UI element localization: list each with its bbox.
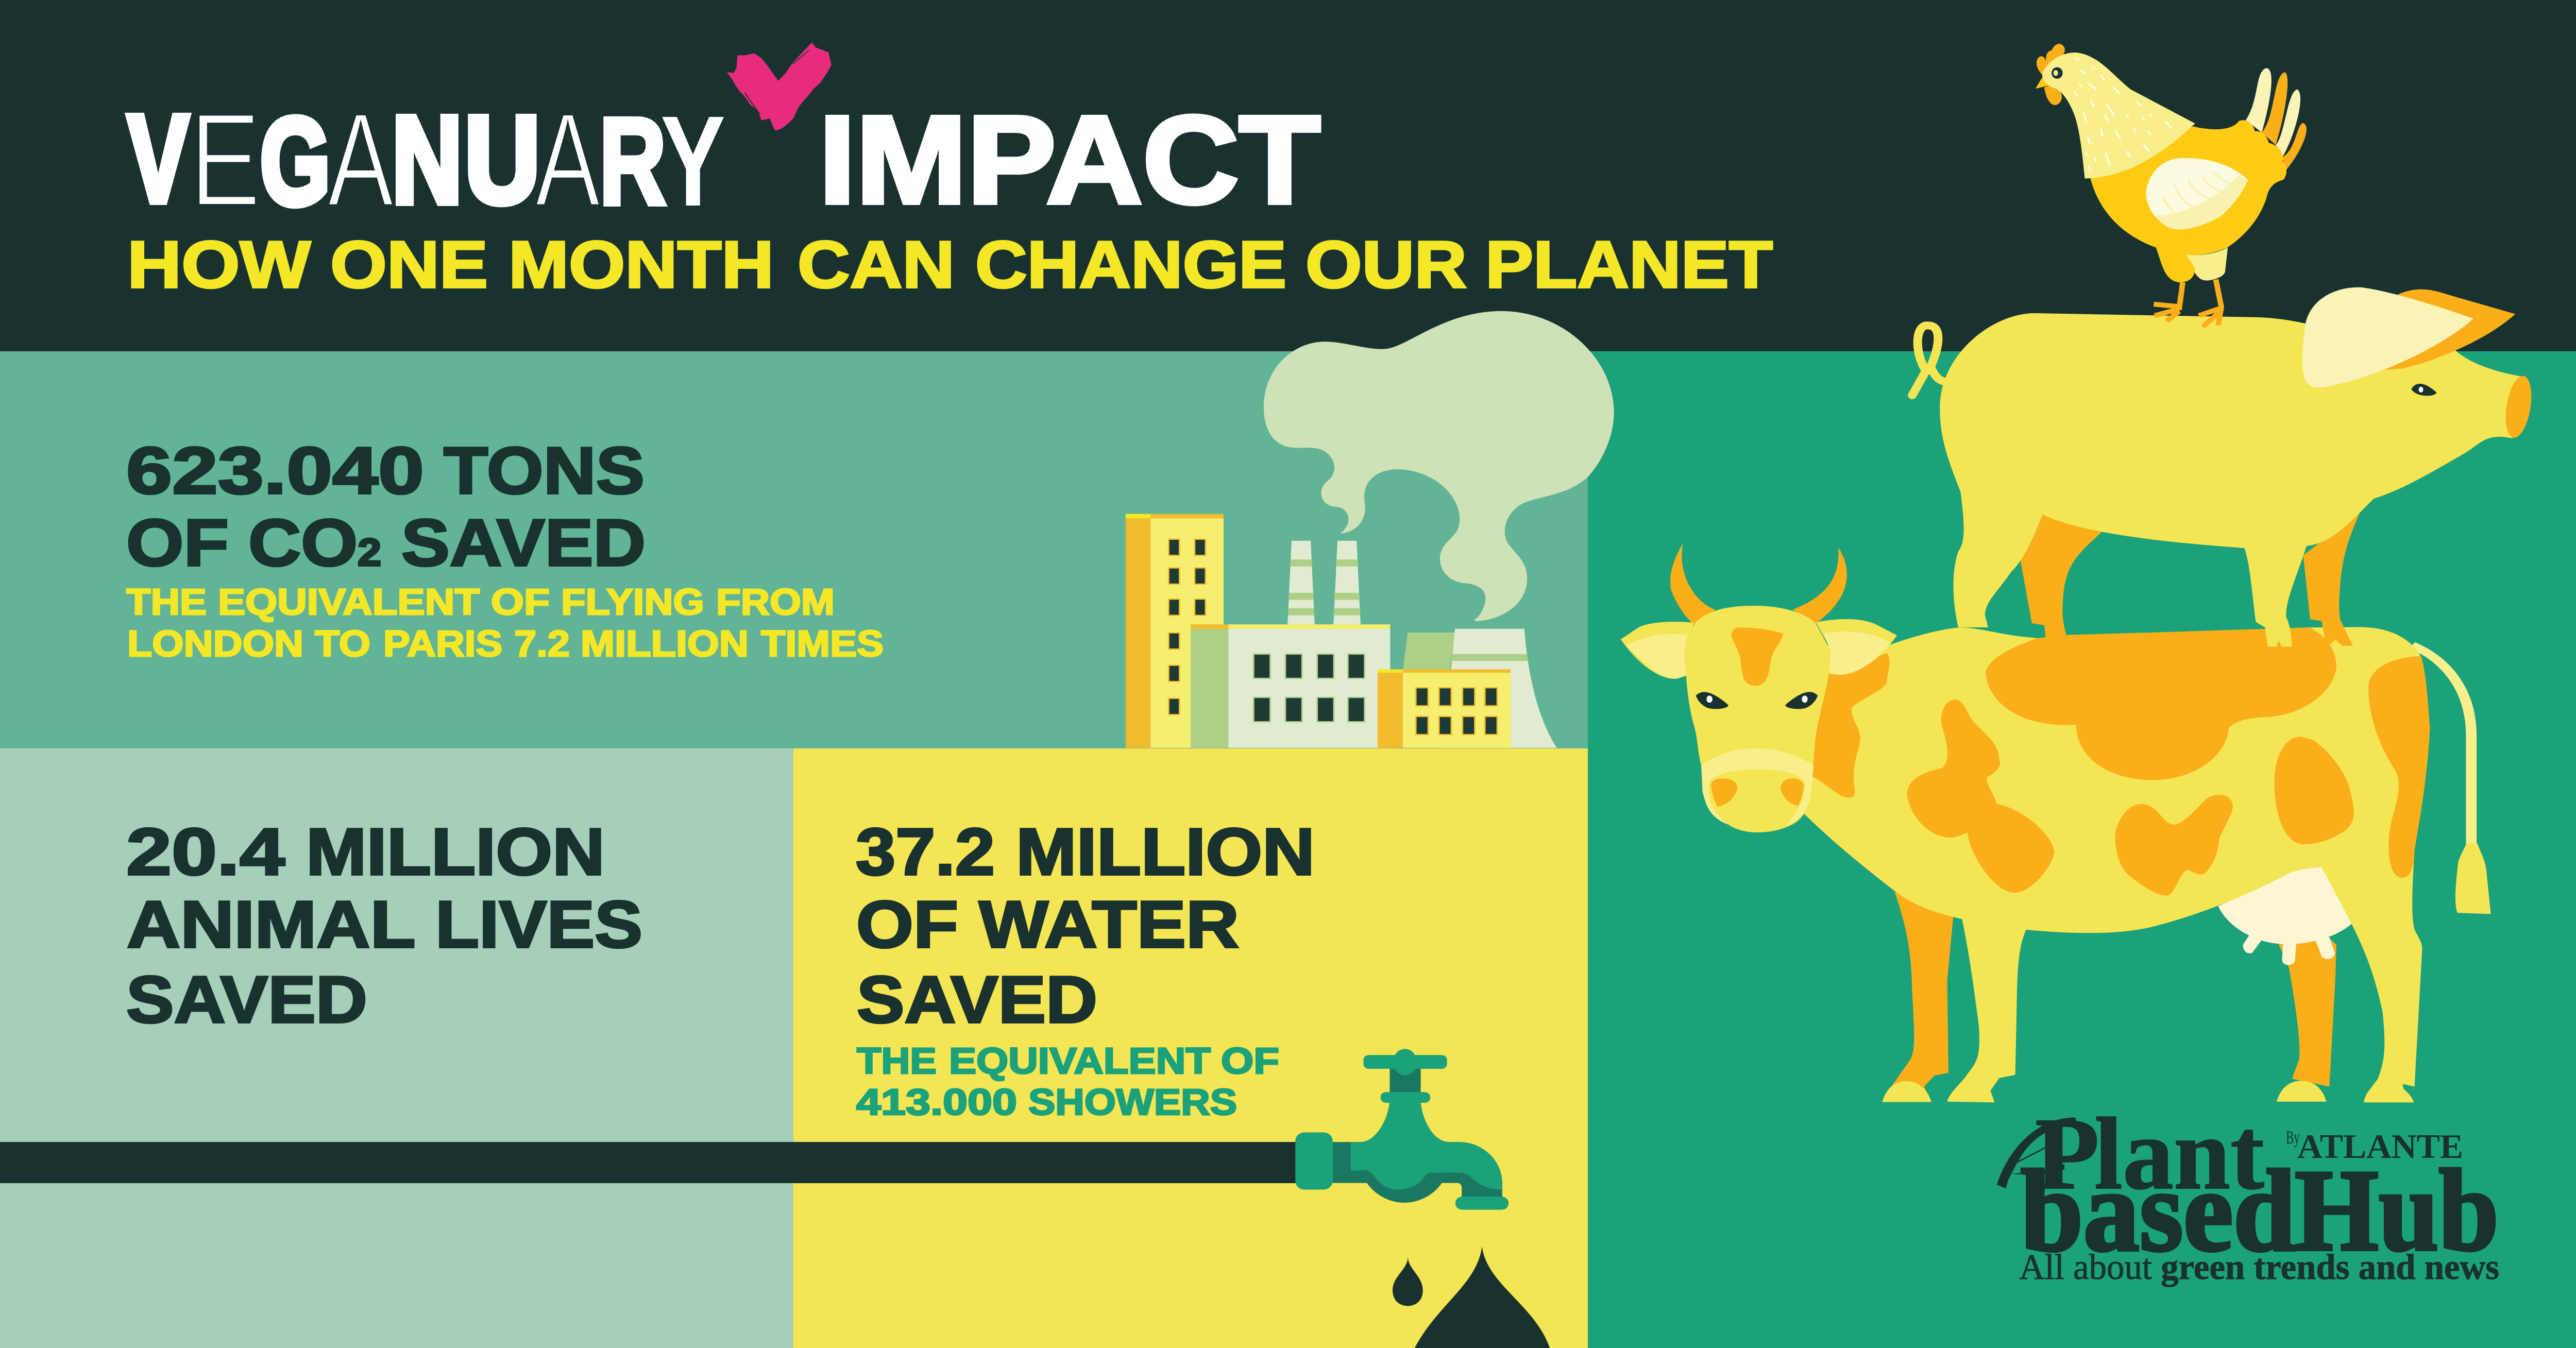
note: flights line 2: TIMES [761,624,884,664]
stat line 1: 20.4 [126,815,285,889]
cow tail [2412,645,2471,844]
pig far legs [2020,510,2361,648]
stat: CO2 tons line 1: TONS [444,434,645,508]
note: showers line 2: 413.000 [856,1082,1017,1123]
cow tail tuft [2455,843,2491,914]
chicken neck speckles [2075,59,2172,172]
stat line 1: 37.2 [856,815,995,889]
subtitle: ONE [330,228,488,302]
text block: water saved [856,815,1315,1123]
cow eyes [1696,692,1818,709]
stat: CO2 tons line 2: CO2 [248,506,379,580]
icon: leaf [1997,1117,2077,1188]
panel: right green background [1588,351,2576,1348]
note: flights line 1: OF [491,582,550,623]
title: Veganuary: V [128,90,189,228]
cow udder [2218,867,2352,965]
logo credit: Atlante: ATLANTE [2297,1128,2463,1166]
cow head [1685,606,1831,832]
large water drop [1415,1247,1550,1348]
title: Veganuary: G [260,92,330,230]
stat: CO2 tons line 1: 623.040 [126,434,424,508]
panel: animal lives saved [0,748,793,1348]
cow spots [1811,627,2430,896]
illustration: pig [1912,287,2535,648]
text block: animal lives saved [126,815,642,1037]
subtitle: HOW [127,228,311,302]
cow far legs [1882,892,2336,1102]
tap ring [1381,1092,1430,1103]
chimneys [1287,541,1361,624]
water pipe [0,1142,1298,1183]
stat line 2: LIVES [435,888,642,962]
title: Veganuary: A [535,85,601,234]
cow forehead spot [1731,627,1783,686]
note: flights line 2: MILLION [581,624,749,664]
title: Veganuary: U [465,91,540,229]
logo word: Plant: lant [2094,1097,2264,1211]
chicken tail feathers [2246,68,2307,172]
stat line 1: MILLION [1016,815,1315,889]
note: showers line 1: THE [857,1041,937,1082]
text block: CO2 saved [126,434,884,664]
tap collar [1295,1132,1333,1189]
smoke cloud [1264,311,1614,621]
chicken head and neck [2042,53,2195,179]
cow ears [1621,619,1897,679]
chicken comb and wattle [2037,44,2065,105]
note: flights line 1: FLYING [561,582,704,623]
pig curly tail [1912,326,1949,395]
small building [1378,669,1511,748]
cow body [1804,627,2430,1102]
logo word: based: based [2021,1147,2296,1276]
note: flights line 2: PARIS [383,624,502,664]
logo word: Plant: P [2035,1097,2099,1211]
pig body [1940,313,2524,646]
icon: pink heart [727,43,832,131]
stat line 2: WATER [979,888,1239,962]
chicken wing [2146,158,2248,229]
tall building [1126,514,1224,748]
main factory building [1191,624,1390,748]
cow nostrils [1711,778,1804,807]
logo: Plant Based Hub [1997,1097,2499,1287]
logo tagline: All about green trends and news [2019,1248,2499,1287]
note: flights line 1: THE [126,582,207,623]
pig snout [2502,374,2535,439]
subtitle: OUR [1306,228,1467,302]
note: flights line 2: 7.2 [514,624,570,664]
stat line 1: MILLION [306,815,605,889]
logo credit: By: By [2286,1127,2300,1148]
chicken back thigh [2186,247,2228,281]
subtitle: CHANGE [975,228,1286,302]
note: showers line 1: EQUIVALENT [949,1041,1211,1082]
note: flights line 1: FROM [716,582,835,623]
chicken beak [2036,77,2050,89]
title: Veganuary: N [392,91,462,229]
note: flights line 2: TO [315,624,370,664]
stat line 2: ANIMAL [127,888,414,962]
stat: CO2 tons line 2: OF [126,506,229,580]
stat: CO2 tons line 2: SAVED [401,506,646,580]
tap stem [1389,1067,1421,1093]
note: flights line 1: EQUIVALENT [218,582,480,623]
title: Veganuary: E [190,85,261,234]
tap body shadow [1333,1103,1502,1203]
pig ear [2302,287,2515,387]
stat line 3: SAVED [857,963,1097,1037]
tap handle [1363,1049,1447,1075]
note: flights line 2: LONDON [127,624,303,664]
chicken body [2090,120,2286,282]
spout ring [1455,1197,1509,1210]
chicken legs [2154,280,2222,327]
panel: CO2 saved [0,351,1588,748]
subtitle: MONTH [509,228,774,302]
icon: water tap with drops [1295,1049,1550,1348]
panel: water saved [793,748,1588,1348]
stat line 3: SAVED [126,963,367,1037]
small water drop [1393,1257,1423,1306]
stat line 2: OF [856,888,958,962]
tap body [1351,1103,1502,1189]
cooling tower [1403,629,1557,748]
cow muzzle [1701,748,1814,826]
title: Veganuary: Y [660,89,725,233]
title: Impact: IMPACT [819,90,1320,230]
chicken eye [2052,67,2063,79]
header band [0,0,2576,351]
pig eye [2411,384,2436,396]
title: Veganuary: A [328,85,394,234]
note: showers line 2: SHOWERS [1028,1082,1237,1123]
cow horns [1670,543,1847,625]
note: showers line 1: OF [1221,1041,1279,1082]
illustration: chicken [2036,44,2307,327]
title: Veganuary: R [599,92,666,230]
illustration: factory with smoke [1126,311,1614,748]
cow hooves [1882,1081,2414,1102]
illustration: cow [1621,543,2491,1102]
logo word: Hub: Hub [2295,1146,2499,1275]
subtitle: CAN [798,228,955,302]
subtitle: PLANET [1485,228,1773,302]
